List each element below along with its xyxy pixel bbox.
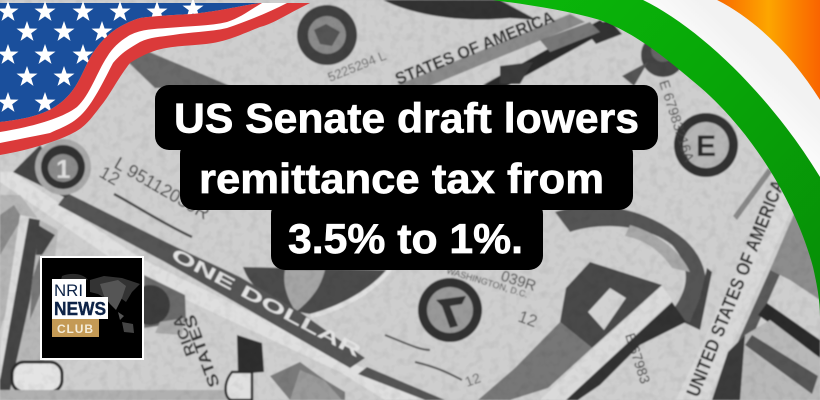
dark gap and top-right bills <box>483 20 685 90</box>
logo NEWS text: NEWS <box>54 299 106 319</box>
centre-lower bill corner with numeral 1: E 67983 <box>622 331 654 386</box>
bottom centre pieces <box>226 335 345 400</box>
logo frame <box>41 257 143 359</box>
bill under logo with AMERICA text: RICA <box>169 313 200 358</box>
ONE DOLLAR band: ONE DOLLAR <box>168 245 364 361</box>
India flag arc corner <box>493 0 820 317</box>
portrait oval right <box>555 206 712 330</box>
logo NRI text: NRI <box>54 281 83 300</box>
signature lower <box>385 335 483 390</box>
headline line 2: remittance tax from <box>199 155 604 202</box>
flag blue field <box>0 3 270 122</box>
logo CLUB text: CLUB <box>57 322 93 336</box>
dark engraving behind upper left of headline <box>128 48 235 88</box>
headline panel <box>155 85 658 270</box>
logo world map <box>60 274 140 333</box>
logo NEWS tab <box>52 297 108 319</box>
bill: top centre with seal: 5225294 L <box>326 48 388 85</box>
seal with 1 upper left: 1 <box>56 154 70 184</box>
centre-lower bill corner with numeral 1: 039R <box>499 268 538 295</box>
seal E and serial <box>656 78 738 177</box>
logo NRI tab <box>52 279 86 298</box>
saffron arc <box>717 0 820 100</box>
left dark vertical band <box>0 195 58 400</box>
seal with 1 upper left <box>35 139 91 195</box>
seal and text lower centre: WASHINGTON, D.C. <box>445 265 529 300</box>
band: UNITED STATES top: STATES OF AMERICA <box>392 7 557 89</box>
green arc <box>493 0 820 317</box>
portrait lower centre <box>243 267 392 318</box>
headline line 3: 3.5% to 1%. <box>288 215 523 262</box>
headline line 1: US Senate draft lowers <box>174 94 639 142</box>
seal E and serial: E 67983216A <box>656 78 698 164</box>
bill under logo with AMERICA text: STATES <box>182 312 224 389</box>
right band: UNITED STATES OF AMERICA: UNITED STATES OF AMERICA <box>683 177 790 400</box>
centre-lower bill corner with numeral 1: 12 <box>516 307 540 331</box>
headline background row 1 <box>155 85 658 150</box>
flag red stripe <box>0 3 310 155</box>
flag stars <box>0 0 204 112</box>
signature lower: 12 <box>463 369 483 390</box>
bill under logo with AMERICA text <box>130 275 224 389</box>
US flag ribbon corner <box>0 0 310 155</box>
ONE DOLLAR band <box>13 145 445 400</box>
lower right text block and dark bar <box>712 170 820 400</box>
logo CLUB tab <box>52 319 99 337</box>
bottom left numeral and border <box>0 362 230 400</box>
seal and text lower centre <box>418 265 529 342</box>
flag white stripe <box>0 3 287 143</box>
serial and signature left: 12 <box>96 162 123 189</box>
centre-lower bill corner with numeral 1 <box>478 262 686 400</box>
serial and signature left: L 95112039R <box>111 153 213 224</box>
headline background row 2 <box>180 140 633 210</box>
headline background row 3 <box>271 200 543 270</box>
diagonal light strip <box>0 172 430 400</box>
bill: top centre with seal <box>297 0 537 85</box>
seal E and serial: E <box>696 130 716 163</box>
logo: NRI News Club <box>41 257 143 359</box>
white arc <box>643 0 820 177</box>
